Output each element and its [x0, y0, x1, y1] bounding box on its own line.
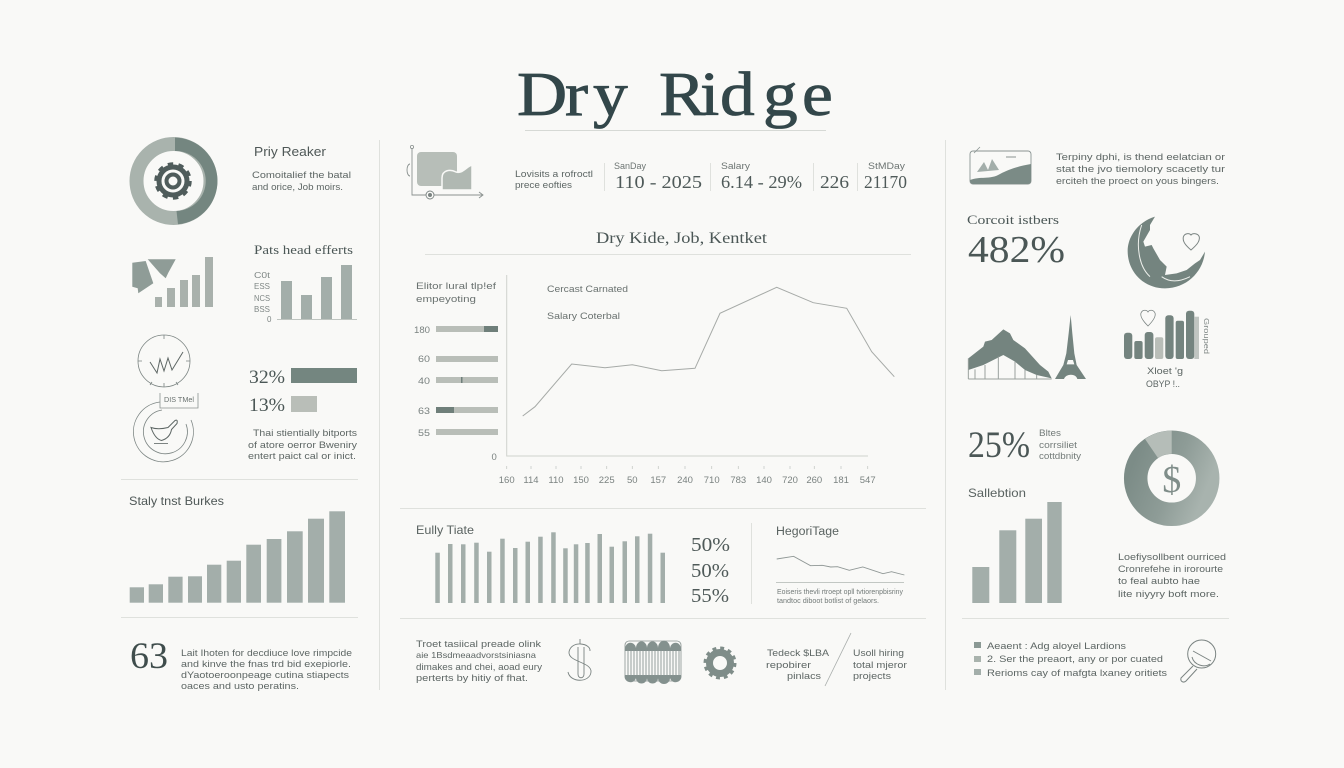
chart heading: employing — [416, 281, 496, 305]
stat: 25%: 25% — [968, 425, 1030, 466]
list with bullets — [974, 641, 1167, 679]
text block: stat note: Thai stientially bitports — [253, 428, 357, 439]
bar chart: small: C0t — [254, 271, 271, 280]
text block: lower right note — [1118, 552, 1226, 600]
label: Xloet: Xloet 'g — [1147, 366, 1183, 377]
text block: stat note — [248, 428, 357, 462]
text block: 63 note: and kinve the fnas trd bid exepiorle. — [181, 659, 351, 670]
text block: top right note — [1056, 152, 1225, 187]
horizontal bars — [414, 325, 498, 439]
icon: area chart — [407, 145, 483, 199]
x axis labels: 160 — [499, 475, 515, 486]
text block: top right note: erciteh the proect on yous bingers. — [1056, 176, 1219, 187]
bar chart: rounded bars with heart — [1124, 310, 1211, 359]
text block: bottom note: Troet tasiical preade olink — [416, 639, 541, 650]
donut chart with dollar: $ — [1162, 459, 1181, 501]
x axis labels: 783 — [730, 475, 746, 486]
x axis labels: 50 — [627, 475, 638, 486]
stat: 6.14 - 29%: Salary — [721, 161, 751, 171]
bar chart: rising bars — [130, 511, 345, 603]
panel: center column — [407, 145, 907, 686]
label: Xloet — [1146, 366, 1183, 390]
text block: Usoll hiring: projects — [853, 671, 891, 682]
x axis labels: 710 — [704, 475, 720, 486]
text block: lower right note: Cronrefehe in irorourte — [1118, 564, 1223, 575]
text block: mini chart note: tandtoc diboot botlist of gelaors. — [777, 598, 879, 605]
heading: Pats head efferts: Pats head efferts — [254, 242, 353, 257]
panel: right column — [967, 147, 1226, 682]
list with bullets: Rerioms cay of mafgta lxaney oritiets — [987, 668, 1167, 679]
chart heading: employing: empeyoting — [416, 294, 476, 305]
stat: 110 - 2025 — [604, 161, 702, 192]
bar chart: rounded bars with heart: Grouped — [1202, 318, 1211, 354]
legend labels: Cercast Carnated — [547, 284, 628, 295]
text block: Tedeck: repobirer — [766, 660, 811, 671]
text block: 25% note: Bltes — [1039, 428, 1062, 438]
x axis labels: 110 — [548, 475, 564, 486]
text block: 63 note — [181, 648, 352, 692]
tag: DIS TMel: DIS TMel — [164, 395, 194, 404]
text block: lower right note: to feal aubto hae — [1118, 576, 1200, 587]
donut chart with dollar — [1136, 431, 1208, 514]
text block: bottom note — [416, 639, 542, 684]
stat: 21170: StMDay — [868, 161, 906, 171]
stats: percentages: 50% — [691, 560, 729, 582]
panel: left column — [129, 138, 357, 692]
x axis labels: 140 — [756, 475, 772, 486]
text block: donut note: and orice, Job moirs. — [252, 182, 343, 193]
stats: percentages: 50% — [691, 534, 730, 556]
icon: dollar outline — [568, 639, 591, 680]
text block: Tedeck: pinlacs — [787, 671, 821, 682]
text block: header note: prece eofties — [515, 180, 572, 191]
legend labels: Salary Coterbal — [547, 311, 620, 322]
stat: 13% — [249, 395, 317, 416]
text block: bottom note: aie 1Bsdmeaadvorstsiniasna — [416, 650, 536, 660]
bar chart: small: ESS — [254, 282, 270, 291]
text block: mini chart note: Eoiseris thevli rtroept opll tvtiorenpbisriny — [777, 589, 903, 596]
text block: bottom note: dimakes and chei, aoad eury — [416, 662, 542, 673]
stat: 6.14 - 29%: 6.14 - 29% — [721, 172, 802, 192]
stat: 110 - 2025: SanDay — [614, 161, 646, 171]
list with bullets: Aeaent : Adg aloyel Lardions — [987, 641, 1126, 652]
icon: map with bars — [132, 257, 213, 307]
label: Xloet: OBYP !.. — [1146, 379, 1180, 390]
text block: Tedeck: Tedeck $LBA — [767, 648, 830, 659]
x axis labels: 547 — [860, 475, 876, 486]
icon: magnifier — [1181, 640, 1216, 682]
text block: Usoll hiring: total mjeror — [853, 660, 907, 671]
line chart: 0 — [492, 452, 497, 463]
chart heading: employing: Elitor lural tlp!ef — [416, 281, 496, 292]
bar chart: four bars — [972, 502, 1062, 603]
tag: DIS TMel — [160, 393, 198, 408]
x axis labels: 114 — [523, 475, 539, 486]
stat: 6.14 - 29% — [710, 161, 802, 192]
text block: top right note: Terpiny dphi, is thend eelatcian or — [1056, 152, 1225, 163]
heading: Eully Tiate: Eully Tiate — [416, 523, 474, 537]
mini line chart — [776, 556, 904, 583]
horizontal bars: 180 — [414, 325, 430, 336]
stat: 21170: 21170 — [864, 172, 907, 192]
stat: 482%: 482% — [968, 229, 1065, 271]
x axis labels: 181 — [833, 475, 849, 486]
bar chart: small: BSS — [254, 305, 270, 314]
x axis labels: 150 — [573, 475, 589, 486]
text block: donut note — [252, 170, 351, 193]
bar chart: small — [254, 265, 357, 324]
text block: 63 note: Lait Ihoten for decdiuce love rimpcide — [181, 648, 352, 659]
text block: lower right note: lite niyyry boft more. — [1118, 589, 1219, 600]
stat: 13%: 13% — [249, 395, 285, 416]
stats: percentages — [691, 534, 730, 607]
icon: tower — [1055, 315, 1086, 379]
text block: 63 note: dYaotoeroonpeage cutina stiapects — [181, 670, 349, 681]
horizontal bars: 60 — [418, 354, 430, 365]
icon: landscape card — [970, 147, 1031, 184]
horizontal bars: 40 — [418, 376, 430, 387]
x axis labels: 720 — [782, 475, 798, 486]
text block: 25% note: corrsiliet — [1039, 440, 1078, 450]
text block: 63 note: oaces and usto peratins. — [181, 681, 299, 692]
text block: header note: Lovisits a rofroctl — [515, 169, 593, 180]
stat: 63: 63 — [130, 636, 168, 677]
icon: radiator — [625, 641, 681, 684]
text block: Tedeck — [766, 648, 830, 682]
horizontal bars: 55 — [418, 428, 430, 439]
stats: percentages: 55% — [691, 585, 729, 607]
text block: stat note: of atore oerror Bweniry — [248, 440, 357, 451]
text block: Usoll hiring — [853, 648, 907, 682]
stat: 32%: 32% — [249, 367, 285, 388]
text block: 25% note: cottdbnity — [1039, 451, 1082, 461]
bar chart: small: 0 — [267, 315, 272, 324]
legend labels — [547, 284, 628, 322]
stat: 21170 — [857, 161, 907, 192]
icon: mountain — [968, 329, 1052, 379]
text block: header note — [515, 169, 593, 191]
text block: Usoll hiring: Usoll hiring — [853, 648, 904, 659]
icon: gear — [706, 648, 734, 678]
stat: 110 - 2025: 110 - 2025 — [615, 172, 702, 192]
icon: mortar and pestle — [133, 402, 193, 462]
text block: stat note: entert paict cal or inict. — [248, 451, 356, 462]
text block: top right note: stat the jvo tiemolory scacetly tur — [1056, 164, 1225, 175]
bar chart: small: NCS — [254, 294, 270, 303]
list with bullets: 2. Ser the preaort, any or por cuated — [987, 654, 1163, 665]
text block: bottom note: perterts by hitiy of fhat. — [416, 673, 528, 684]
stat: 226: 226 — [820, 172, 849, 192]
donut chart with gear — [136, 138, 217, 224]
x axis labels: 157 — [650, 475, 666, 486]
bar chart: thin bars — [435, 532, 665, 603]
text block: lower right note: Loefiysollbent ourriced — [1118, 552, 1226, 563]
heading: Priy Reaker: Priy Reaker — [254, 145, 326, 159]
x axis labels: 225 — [599, 475, 615, 486]
x axis labels: 260 — [806, 475, 822, 486]
line chart — [492, 275, 894, 486]
heading: Staly tnst Burkes: Staly tnst Burkes — [129, 494, 224, 508]
heading: Sallebtion: Sallebtion — [968, 486, 1026, 500]
x axis labels: 240 — [677, 475, 693, 486]
stat: 482% — [967, 212, 1065, 271]
stat: 32% — [249, 367, 357, 388]
title: Dry Ridge — [517, 60, 833, 129]
icon: feather crescent — [1128, 217, 1205, 288]
x axis labels — [499, 475, 876, 486]
heading: Dry Kide, Job, Kentket: Dry Kide, Job, Kentket — [596, 230, 768, 247]
stat: 482%: Corcoit istbers — [967, 212, 1059, 227]
text block: donut note: Comoitalief the batal — [252, 170, 351, 181]
horizontal bars: 63 — [418, 406, 430, 417]
text block: 25% note — [1039, 428, 1082, 461]
icon: clock gauge — [138, 335, 190, 387]
heading: HegoriTage: HegoriTage — [776, 526, 839, 538]
stat: 226 — [813, 163, 849, 192]
text block: mini chart note — [777, 589, 903, 605]
